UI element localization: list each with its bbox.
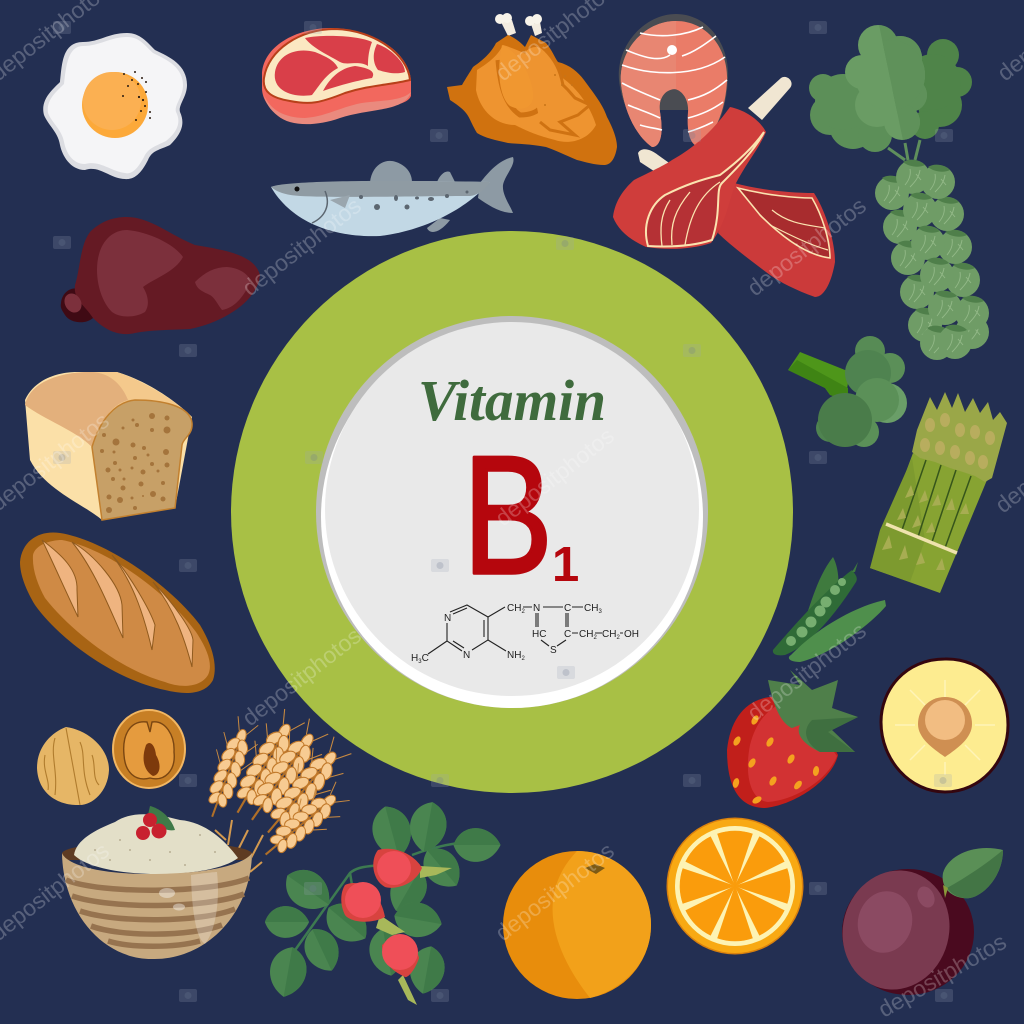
plum with leaf xyxy=(829,848,1003,1002)
thiamine chemical structure: 2 xyxy=(521,656,525,662)
peas xyxy=(773,557,886,662)
heading: B1: B xyxy=(463,422,553,609)
thiamine chemical structure: CH xyxy=(584,603,598,614)
thiamine chemical structure: CH xyxy=(579,629,593,640)
thiamine chemical structure: 2 xyxy=(616,635,620,641)
thiamine chemical structure: 3 xyxy=(418,659,422,665)
thiamine chemical structure: 2 xyxy=(521,609,525,615)
walnuts xyxy=(37,710,185,805)
depositphotos watermarks: depositphotos xyxy=(742,617,871,726)
salmon steak xyxy=(619,14,728,147)
thiamine chemical structure: HC xyxy=(532,629,546,640)
thiamine chemical structure: S xyxy=(550,645,557,656)
thiamine chemical structure: CH xyxy=(602,629,616,640)
fried egg xyxy=(43,33,187,179)
depositphotos watermarks: depositphotos xyxy=(490,837,619,946)
depositphotos watermarks: depositphotos xyxy=(237,622,366,731)
plate: green rim with white centre xyxy=(231,231,793,793)
thiamine chemical structure xyxy=(411,603,639,665)
strawberry xyxy=(727,670,858,808)
heading: B1: 1 xyxy=(552,538,579,592)
fish xyxy=(271,157,514,236)
steak xyxy=(262,28,411,124)
depositphotos watermarks: depositphotos xyxy=(874,928,1011,1022)
peach half xyxy=(881,659,1008,792)
lamb chops xyxy=(613,77,835,297)
thiamine chemical structure: C xyxy=(564,629,571,640)
bowl of porridge xyxy=(62,806,252,959)
depositphotos watermarks: depositphotos xyxy=(742,192,871,301)
liver xyxy=(61,217,260,334)
roast chicken xyxy=(447,13,617,165)
berries garnish xyxy=(136,806,175,840)
orange xyxy=(503,851,651,999)
rose hip branch xyxy=(265,799,501,1005)
depositphotos watermarks: depositphotos xyxy=(490,422,619,531)
thiamine chemical structure: OH xyxy=(624,629,639,640)
thiamine chemical structure: 2 xyxy=(593,635,597,641)
baguette xyxy=(20,532,215,693)
thiamine chemical structure: N xyxy=(444,613,451,624)
thiamine chemical structure: C xyxy=(564,603,571,614)
bread loaf xyxy=(25,372,192,520)
broccoli xyxy=(788,336,907,447)
orange slice xyxy=(666,818,804,954)
title: Vitamin: Vitamin xyxy=(418,368,606,433)
asparagus bundle xyxy=(870,392,1007,593)
thiamine chemical structure: N xyxy=(533,603,540,614)
wheat ears xyxy=(194,704,358,872)
depositphotos watermarks: depositphotos xyxy=(237,192,366,301)
thiamine chemical structure: C xyxy=(422,653,429,664)
thiamine chemical structure: 3 xyxy=(598,609,602,615)
thiamine chemical structure: CH xyxy=(507,603,521,614)
Brussels sprouts stalk with leaves xyxy=(809,25,989,360)
thiamine chemical structure: NH xyxy=(507,650,521,661)
thiamine chemical structure: N xyxy=(463,650,470,661)
thiamine chemical structure: H xyxy=(411,653,418,664)
